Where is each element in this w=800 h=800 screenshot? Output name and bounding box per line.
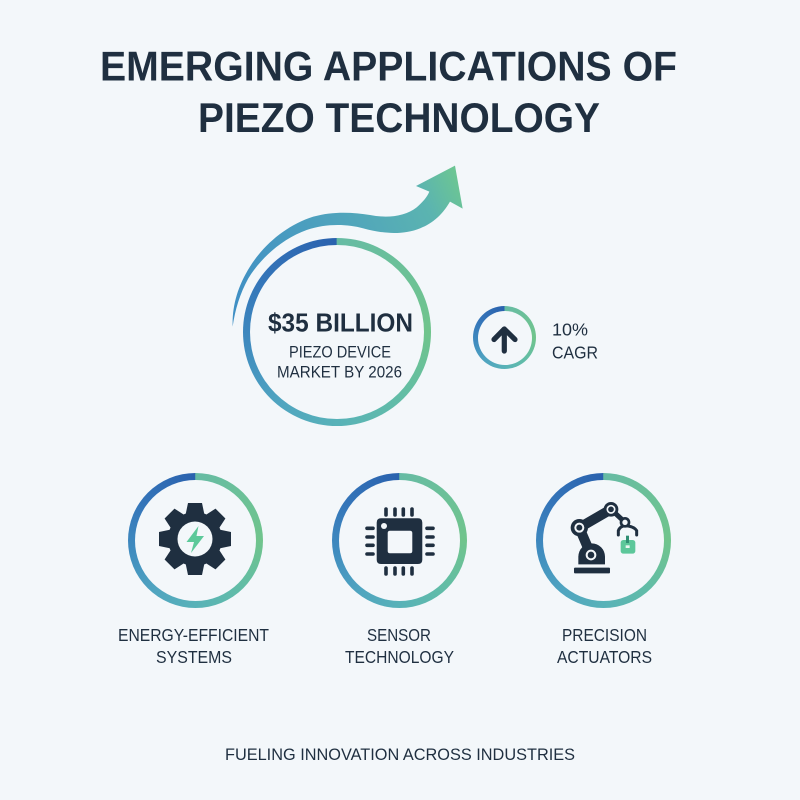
CAGR arrow and text — [491, 320, 598, 362]
title — [100, 42, 677, 140]
growth arrow — [232, 166, 463, 326]
energy ring — [128, 473, 263, 608]
panel: sensor technology — [332, 473, 467, 667]
main ring — [243, 238, 431, 426]
energy label — [118, 625, 269, 667]
panel: energy-efficient systems — [118, 473, 269, 667]
actuator label: PRECISION — [562, 625, 647, 645]
actuator ring — [536, 473, 671, 608]
energy label: SYSTEMS — [156, 647, 232, 667]
sensor label: SENSOR — [367, 625, 431, 645]
sensor label: TECHNOLOGY — [345, 647, 454, 667]
panel: CAGR — [473, 306, 598, 369]
market text: PIEZO DEVICE — [289, 342, 391, 362]
actuator label: ACTUATORS — [557, 647, 652, 667]
CAGR arrow and text: CAGR — [552, 342, 598, 362]
CAGR ring — [473, 306, 536, 369]
sensor label — [345, 625, 454, 667]
title: PIEZO TECHNOLOGY — [198, 94, 600, 140]
CAGR arrow and text: 10% — [552, 320, 588, 340]
icon: microchip — [367, 509, 433, 574]
footer tagline: FUELING INNOVATION ACROSS INDUSTRIES — [225, 745, 575, 764]
panel: precision actuators — [536, 473, 671, 667]
icon: gear with bolt — [159, 503, 231, 575]
panel: market size — [243, 238, 431, 426]
market text — [268, 310, 413, 382]
actuator label — [557, 625, 652, 667]
icon: robot arm — [571, 502, 637, 573]
market text: $35 BILLION — [268, 310, 413, 338]
market text: MARKET BY 2026 — [277, 362, 402, 382]
sensor ring — [332, 473, 467, 608]
